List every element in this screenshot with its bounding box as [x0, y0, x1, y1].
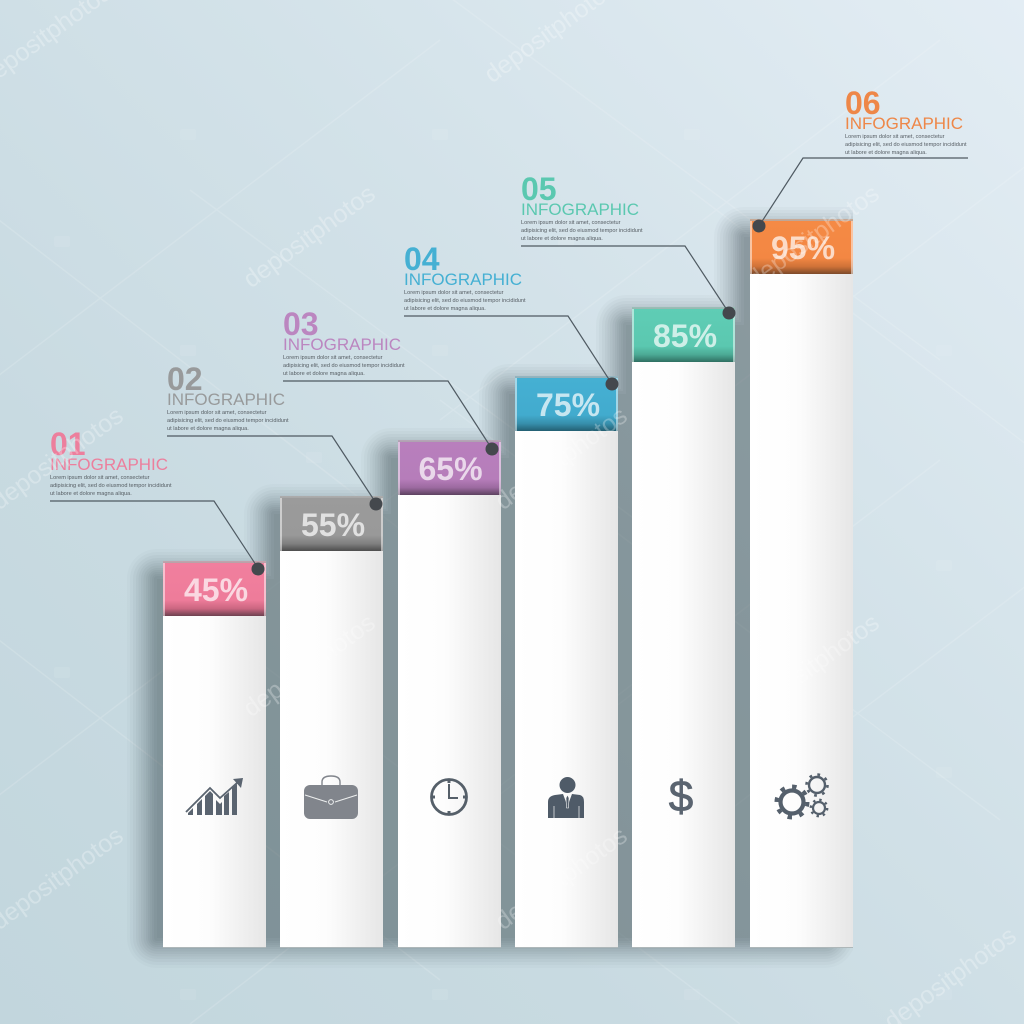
heading 04: INFOGRAPHIC	[404, 270, 522, 289]
text: depositphotos	[742, 179, 885, 294]
text block 05: adipisicing elit, sed do eiusmod tempor incididunt	[521, 228, 643, 234]
icon: briefcase	[304, 775, 358, 819]
white column 01	[163, 616, 266, 948]
icon: rising chart	[185, 778, 243, 815]
text block 05	[521, 220, 643, 242]
text block 01: Lorem ipsum dolor sit amet, consectetur	[50, 475, 150, 481]
text block 02: adipisicing elit, sed do eiusmod tempor incididunt	[167, 418, 289, 424]
text block 01	[50, 475, 172, 497]
percentage tab 95%: 95%	[771, 230, 835, 266]
text block 06: adipisicing elit, sed do eiusmod tempor incididunt	[845, 142, 967, 148]
white column 04	[515, 431, 618, 948]
text block 03	[283, 355, 405, 377]
percentage tab 85%	[632, 307, 735, 362]
text: depositphotos	[490, 401, 633, 516]
callout 03	[283, 306, 405, 377]
panel: bar 03	[398, 440, 501, 948]
white column 03	[398, 495, 500, 948]
panel: bar 06	[750, 219, 853, 948]
text block 01: ut labore et dolore magna aliqua.	[50, 491, 132, 497]
heading 06: INFOGRAPHIC	[845, 114, 963, 133]
icon: gears	[774, 773, 829, 820]
text block 04: Lorem ipsum dolor sit amet, consectetur	[404, 290, 504, 296]
number 02: 02	[167, 361, 203, 397]
number 03: 03	[283, 306, 319, 342]
white column 02	[280, 551, 383, 948]
text block 03: adipisicing elit, sed do eiusmod tempor incididunt	[283, 363, 405, 369]
percentage tab 75%: 75%	[536, 387, 600, 423]
panel: bar 01	[163, 561, 266, 948]
percentage tab 55%: 55%	[301, 507, 365, 543]
text: depositphotos	[490, 821, 633, 936]
text: depositphotos	[238, 179, 381, 294]
text block 05: ut labore et dolore magna aliqua.	[521, 236, 603, 242]
text block 02	[167, 410, 289, 432]
text block 01: adipisicing elit, sed do eiusmod tempor incididunt	[50, 483, 172, 489]
panel: bar 05	[632, 307, 735, 948]
text block 02: ut labore et dolore magna aliqua.	[167, 426, 249, 432]
text: depositphotos	[238, 608, 381, 723]
text block 03: Lorem ipsum dolor sit amet, consectetur	[283, 355, 382, 361]
panel: bar 02	[280, 496, 383, 948]
heading 02: INFOGRAPHIC	[167, 390, 285, 409]
icon: clock	[430, 778, 468, 816]
percentage tab 65%	[398, 440, 500, 495]
number 01: 01	[50, 426, 86, 462]
percentage tab 75%	[515, 376, 618, 431]
panel: bar 04	[515, 376, 618, 948]
heading 01: INFOGRAPHIC	[50, 455, 168, 474]
callout 05	[521, 171, 643, 242]
percentage tab 95%	[750, 219, 853, 274]
white column 05	[632, 362, 735, 948]
icon: businessman	[548, 777, 584, 818]
percentage tab 45%	[163, 561, 266, 616]
text block 06	[845, 134, 967, 156]
icon: dollar: $	[669, 772, 693, 821]
text block 04: ut labore et dolore magna aliqua.	[404, 306, 486, 312]
callout 06	[845, 85, 967, 156]
text: depositphotos	[742, 608, 885, 723]
percentage tab 55%	[280, 496, 383, 551]
heading 05: INFOGRAPHIC	[521, 200, 639, 219]
callout 02	[167, 361, 289, 432]
text block 06: ut labore et dolore magna aliqua.	[845, 150, 927, 156]
number 04: 04	[404, 241, 440, 277]
number 06: 06	[845, 85, 881, 121]
text block 03: ut labore et dolore magna aliqua.	[283, 371, 365, 377]
percentage tab 45%: 45%	[184, 572, 248, 608]
text block 04	[404, 290, 526, 312]
white column 06	[750, 274, 853, 948]
text block 04: adipisicing elit, sed do eiusmod tempor incididunt	[404, 298, 526, 304]
number 05: 05	[521, 171, 557, 207]
heading 03: INFOGRAPHIC	[283, 335, 401, 354]
percentage tab 65%: 65%	[418, 451, 483, 487]
percentage tab 85%: 85%	[653, 318, 717, 354]
text block 06: Lorem ipsum dolor sit amet, consectetur	[845, 134, 944, 140]
text block 05: Lorem ipsum dolor sit amet, consectetur	[521, 220, 620, 226]
text block 02: Lorem ipsum dolor sit amet, consectetur	[167, 410, 266, 416]
callout 04	[404, 241, 526, 312]
callout 01	[50, 426, 172, 497]
